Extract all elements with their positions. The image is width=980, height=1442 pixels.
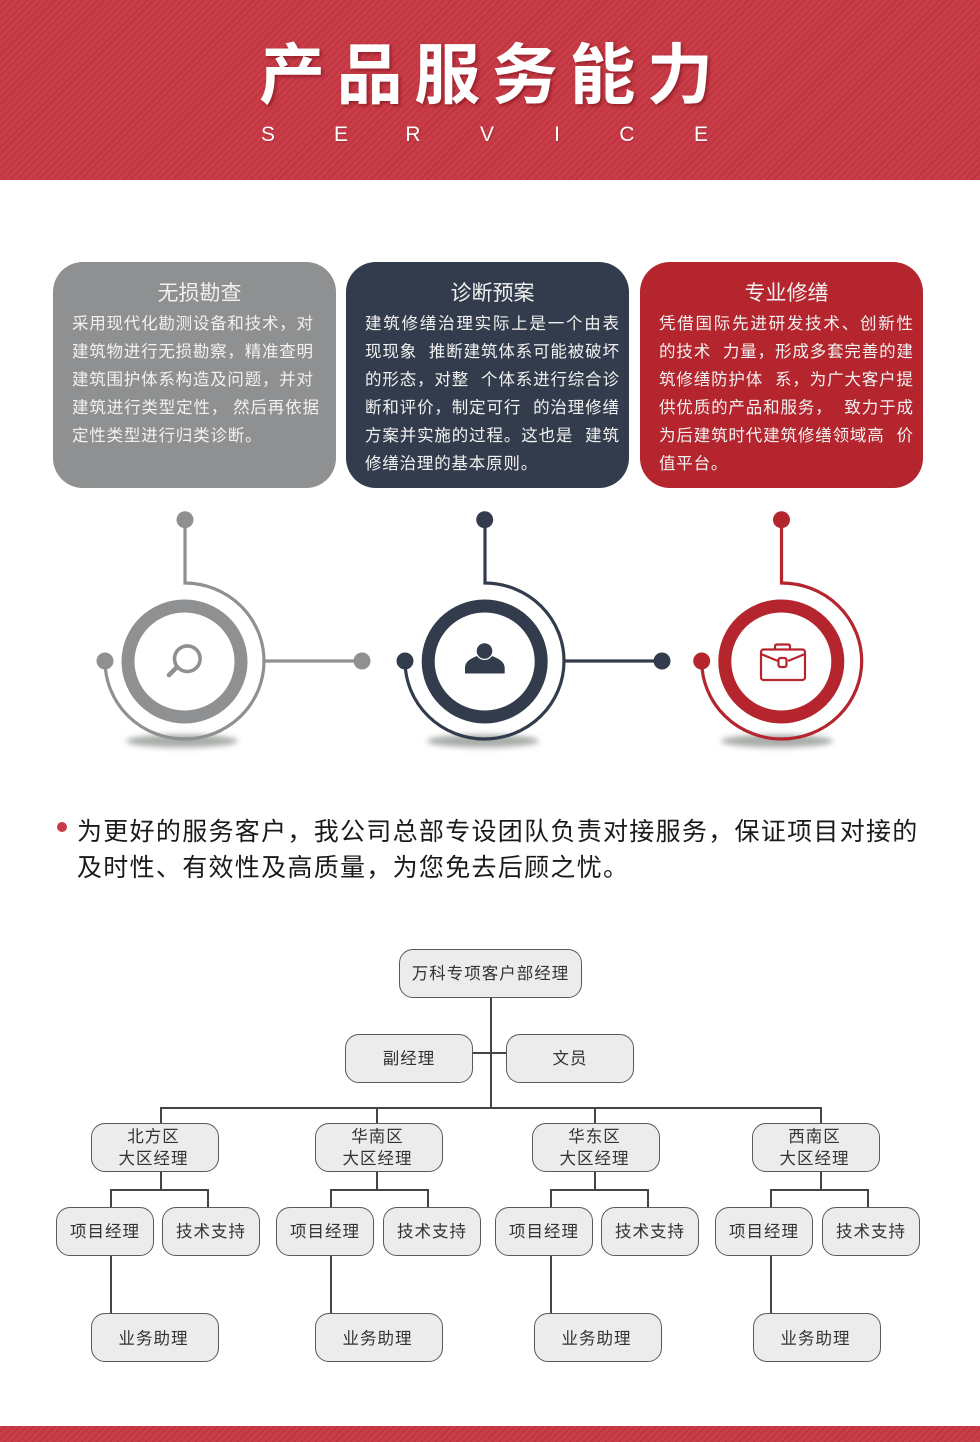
box: 业务助理 4: 业务助理 (780, 1330, 850, 1348)
panel heading: 专业修缮 (744, 282, 828, 305)
box: 项目经理 2: 项目经理 (290, 1223, 360, 1241)
box: 华东区 (532, 1123, 660, 1172)
bullet (57, 822, 67, 832)
panel body text: 建筑物进行无损勘察，精准查明 (72, 343, 313, 361)
connector lines (110, 998, 869, 1313)
box: 万科专项客户部经理: 万科专项客户部经理 (412, 965, 569, 983)
paragraph text (77, 818, 919, 882)
subtitle: SERVICE: V (480, 123, 494, 146)
ring (128, 606, 241, 717)
right connector (564, 659, 662, 663)
subtitle: SERVICE: R (405, 123, 421, 146)
subtitle: SERVICE: E (694, 123, 708, 146)
box: 西南区: 大区经理 (780, 1150, 850, 1168)
box: 北方区: 北方区 (127, 1128, 180, 1146)
box: 副经理: 副经理 (383, 1050, 435, 1068)
panel body text (365, 314, 619, 473)
box: 业务助理 2 (315, 1313, 443, 1362)
panel body text: 现现象 推断建筑体系可能被破坏 (365, 343, 619, 361)
diagram: briefcase (693, 511, 862, 748)
panel body text: 建筑围护体系构造及问题，并对 (72, 371, 313, 389)
box: 北方区: 大区经理 (118, 1150, 188, 1168)
panel body text: 值平台。 (659, 455, 728, 473)
box: 技术支持 1: 技术支持 (176, 1223, 246, 1241)
subtitle: SERVICE: S (261, 123, 275, 146)
box: 技术支持 3: 技术支持 (615, 1223, 685, 1241)
box: 业务助理 1 (91, 1313, 219, 1362)
shadow (721, 734, 833, 748)
panel body text: 的形态，对整 个体系进行综合诊 (365, 371, 619, 389)
diagram: person (396, 511, 670, 748)
panel: 专业修缮 (640, 262, 923, 488)
panel body text (72, 314, 319, 445)
box: 技术支持 1 (162, 1207, 260, 1256)
org chart (56, 949, 920, 1362)
panel heading: 无损勘查 (158, 282, 242, 305)
box: 业务助理 2: 业务助理 (342, 1330, 412, 1348)
panel: 诊断预案 (346, 262, 629, 488)
box: 文员 (506, 1034, 634, 1083)
diagram: search (96, 511, 370, 748)
box: 西南区: 西南区 (788, 1128, 841, 1146)
box: 技术支持 4: 技术支持 (836, 1223, 906, 1241)
panel body text: 建筑进行类型定性，然后再依据 (72, 399, 319, 417)
panel body text: 方案并实施的过程。这也是 建筑 (365, 427, 619, 445)
icon: briefcase (761, 644, 805, 680)
box: 华南区 (315, 1123, 443, 1172)
panel body text: 的技术 力量，形成多套完善的建 (659, 343, 913, 361)
icon: magnifier (169, 646, 200, 675)
intro paragraph (57, 818, 919, 882)
shadow (126, 734, 238, 748)
box: 项目经理 3 (495, 1207, 593, 1256)
box: 业务助理 1: 业务助理 (118, 1330, 188, 1348)
panel body text: 为后建筑时代建筑修缮领域高 价 (659, 427, 913, 445)
header banner (0, 0, 980, 180)
box: 技术支持 2: 技术支持 (397, 1223, 467, 1241)
title: 产品服务能力 (259, 38, 725, 112)
icon: person (465, 642, 505, 674)
nodes (96, 511, 370, 670)
paragraph text: 及时性、有效性及高质量，为您免去后顾之忧。 (77, 854, 629, 882)
box: 华东区: 华东区 (568, 1128, 621, 1146)
box: 华东区: 大区经理 (560, 1150, 630, 1168)
connector arc (405, 520, 564, 739)
paragraph text: 为更好的服务客户，我公司总部专设团队负责对接服务，保证项目对接的 (77, 818, 919, 846)
connector arc (105, 520, 264, 739)
box: 项目经理 2 (276, 1207, 374, 1256)
box: 万科专项客户部经理 (399, 949, 582, 998)
box: 华南区: 大区经理 (342, 1150, 412, 1168)
ring (428, 606, 541, 717)
subtitle: SERVICE: I (554, 123, 560, 146)
footer band (0, 1426, 980, 1442)
box: 项目经理 3: 项目经理 (509, 1223, 579, 1241)
panel body text: 建筑修缮治理实际上是一个由表 (365, 315, 619, 333)
box: 副经理 (345, 1034, 473, 1083)
shadow (427, 734, 539, 748)
panel body text: 断和评价，制定可行 的治理修缮 (365, 399, 619, 417)
nodes (693, 511, 790, 670)
circular diagrams row (96, 511, 864, 751)
subtitle: SERVICE: C (619, 123, 635, 146)
box: 北方区 (91, 1123, 219, 1172)
panel body text: 修缮治理的基本原则。 (365, 455, 538, 473)
box: 业务助理 3 (534, 1313, 662, 1362)
connector arc (702, 520, 862, 739)
box: 业务助理 3: 业务助理 (562, 1330, 632, 1348)
box: 技术支持 4 (822, 1207, 920, 1256)
panel body text: 筑修缮防护体 系，为广大客户提 (659, 371, 913, 389)
panel heading: 诊断预案 (450, 282, 534, 305)
box: 技术支持 3 (601, 1207, 699, 1256)
box: 业务助理 4 (753, 1313, 881, 1362)
subtitle: SERVICE (261, 123, 708, 146)
box: 西南区 (752, 1123, 880, 1172)
panel body text (659, 314, 913, 473)
box: 项目经理 1: 项目经理 (70, 1223, 140, 1241)
panel body text: 定性类型进行归类诊断。 (72, 427, 262, 445)
box: 项目经理 4: 项目经理 (729, 1223, 799, 1241)
box: 项目经理 4 (715, 1207, 813, 1256)
panel: 无损勘查 (53, 262, 336, 488)
nodes (396, 511, 670, 670)
box: 文员: 文员 (552, 1050, 588, 1068)
ring (725, 606, 838, 717)
subtitle: SERVICE: E (334, 123, 348, 146)
box: 技术支持 2 (383, 1207, 481, 1256)
right connector (265, 659, 362, 663)
box: 华南区: 华南区 (351, 1128, 404, 1146)
panel body text: 凭借国际先进研发技术、创新性 (659, 315, 913, 333)
panel body text: 采用现代化勘测设备和技术，对 (72, 315, 313, 333)
panel body text: 供优质的产品和服务， 致力于成 (659, 399, 913, 417)
box: 项目经理 1 (56, 1207, 154, 1256)
